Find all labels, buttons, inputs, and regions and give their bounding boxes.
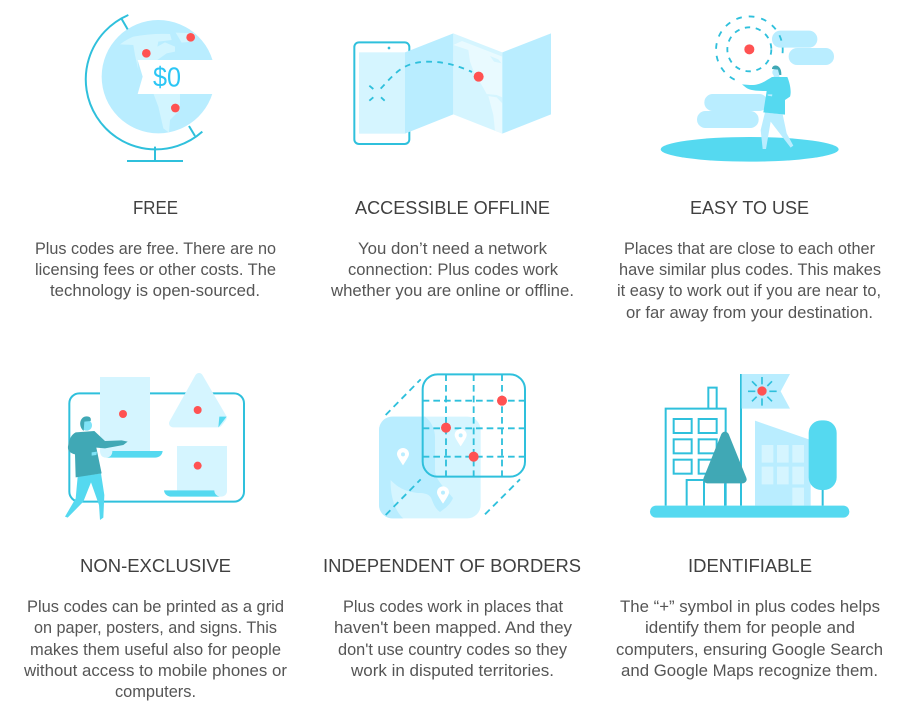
text: non-exclusive description: Plus codes can be printed as a grid [27,597,284,616]
icon: map with grid overlay [379,374,525,518]
text: identifiable description [616,597,883,680]
icon: person with location rings [661,16,839,162]
icon: phone and folded map [354,33,551,144]
text: easy to use description: it easy to work out if you are near to, [617,281,881,300]
text: offline description: connection: Plus codes work [348,260,558,279]
text: borders description: don't use country codes so they [338,640,567,659]
text: identifiable description: and Google Maps recognize them. [621,661,878,680]
text: non-exclusive description: without access to mobile phones or [23,661,287,680]
text: non-exclusive description: computers. [115,682,196,701]
text: non-exclusive description: on paper, posters, and signs. This [34,618,277,637]
heading: identifiable: IDENTIFIABLE [688,556,812,576]
text: free description: Plus codes are free. There are no [35,239,276,258]
text: non-exclusive description [23,597,287,701]
text: offline description: whether you are online or offline. [330,281,574,300]
icon: globe with $0 banner: $0 [153,61,181,92]
icon: city buildings with flag [650,374,849,518]
text: borders description: Plus codes work in places that [343,597,563,616]
heading: independent of borders: INDEPENDENT OF BORDERS [323,556,581,576]
text: easy to use description: have similar plus codes. This makes [619,260,881,279]
text: free description: licensing fees or other costs. The [35,260,276,279]
text: offline description [330,239,574,300]
text: easy to use description [617,239,881,322]
icon: globe with $0 banner [86,15,217,161]
heading: free: FREE [133,198,178,218]
text: borders description: work in disputed territories. [350,661,554,680]
text: identifiable description: The “+” symbol in plus codes helps [620,597,880,616]
heading: easy to use: EASY TO USE [690,198,809,218]
text: free description: technology is open-sourced. [50,281,260,300]
text: borders description: haven't been mapped. And they [334,618,572,637]
text: identifiable description: computers, ensuring Google Search [616,640,883,659]
text: free description [35,239,276,300]
text: non-exclusive description: makes them useful also for people [30,640,281,659]
text: easy to use description: or far away from your destination. [626,303,873,322]
text: easy to use description: Places that are close to each other [624,239,875,258]
heading: non-exclusive: NON-EXCLUSIVE [80,556,231,576]
text: borders description [334,597,572,680]
icon: person with printed signs [65,377,244,520]
text: offline description: You don’t need a network [358,239,547,258]
text: identifiable description: identify them for people and [645,618,855,637]
heading: accessible offline: ACCESSIBLE OFFLINE [355,198,550,218]
